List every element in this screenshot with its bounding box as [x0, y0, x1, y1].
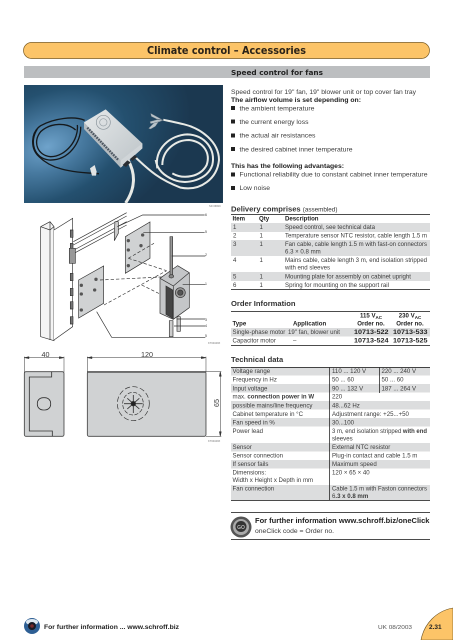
- table: technical data: 90 ... 132 V: [332, 386, 364, 392]
- icon: Schroff globe logo: [24, 618, 40, 634]
- intro text block: The airflow volume is set depending on:: [231, 97, 361, 104]
- table: technical data: max. connection power in W: [232, 394, 314, 400]
- table: delivery comprises: Spring for mounting on the support rail: [285, 282, 389, 289]
- dimension labels: 40: [42, 350, 50, 359]
- table: delivery comprises: 1: [260, 274, 264, 280]
- table: delivery comprises: Qty: [259, 216, 270, 222]
- table: delivery comprises: 4: [233, 257, 237, 264]
- dimension lines: [24, 357, 221, 436]
- callout numbers: 1: [205, 282, 207, 286]
- table: technical data: Cabinet temperature in °C: [232, 411, 304, 418]
- mounting plates: [79, 222, 150, 318]
- heading: technical data: Technical data: [231, 355, 284, 364]
- table: order information: 19" fan, blower unit: [288, 329, 340, 336]
- table: delivery comprises: Mains cable, cable length 3 m, end isolation stripped: [285, 257, 427, 264]
- table: delivery comprises: Fan cable, cable length 1.5 m with fast-on connectors: [285, 241, 427, 248]
- table: order information: 230 V: [399, 312, 415, 320]
- table: order information: [231, 312, 430, 346]
- table: technical data: 110 ... 120 V: [332, 368, 367, 375]
- table: delivery comprises: 1: [233, 224, 237, 231]
- table: order information: Order no.: [357, 320, 385, 328]
- heading: delivery comprises: Delivery comprises (assembled): [231, 204, 337, 214]
- callout numbers: 6: [205, 213, 207, 217]
- table: technical data: Voltage range: [232, 368, 271, 375]
- table: order information: Type: [232, 320, 247, 328]
- icon: oneClick disc: [230, 516, 252, 538]
- table: technical data: 48...62 Hz: [332, 402, 360, 410]
- dimension labels: [42, 350, 221, 407]
- cabinet upright: [41, 218, 73, 341]
- table: technical data: Power lead: [232, 428, 263, 435]
- table: technical data: If sensor fails: [232, 461, 268, 468]
- table: technical data: Input voltage: [232, 386, 268, 392]
- table: order information: 115 V: [360, 312, 376, 320]
- table: order information: 10713-524: [354, 338, 389, 344]
- image code label: SD 06829: [209, 204, 221, 208]
- bullet list: advantages: Functional reliability due to constant cabinet inner temperature: [240, 172, 428, 178]
- table: order information: 10713-533: [393, 329, 428, 336]
- table: delivery comprises: 1: [260, 282, 264, 289]
- table: delivery comprises: 6.3 × 0.8 mm: [285, 248, 321, 256]
- table: delivery comprises: with end sleeves: [284, 264, 330, 272]
- dimension drawing: side and front views: [24, 357, 221, 436]
- table: technical data: 220: [332, 394, 343, 400]
- table: order information: Capacitor motor: [232, 338, 276, 344]
- table: order information: AC: [376, 315, 383, 320]
- table: technical data: 50 ... 60: [332, 376, 355, 384]
- table: order information: 10713-522: [354, 329, 389, 336]
- table: delivery comprises: 1: [260, 224, 264, 231]
- bullet list: depending factors: the ambient temperature: [240, 106, 315, 112]
- table: delivery comprises: Mounting plate for assembly on cabinet upright: [285, 274, 411, 280]
- table: technical data: Cable 1.5 m with Faston connectors: [332, 486, 427, 492]
- table: technical data: sleeves: [332, 436, 353, 442]
- title banner: [24, 42, 430, 58]
- support rail and spring: [69, 213, 127, 263]
- bullet list: depending factors: the current energy loss: [240, 119, 308, 126]
- footer: logo and web address: For further information ... www.schroff.biz: [44, 624, 180, 631]
- section heading bar: Speed control for fans: [231, 68, 324, 77]
- callout numbers: [205, 213, 207, 338]
- table: technical data: Fan connection: [232, 486, 274, 492]
- table: technical data: Maximum speed: [332, 461, 377, 468]
- table: delivery comprises: Speed control, see technical data: [285, 224, 376, 231]
- table: technical data: Width x Height x Depth in mm: [232, 477, 313, 484]
- bullet list: advantages: Low noise: [240, 185, 271, 192]
- table: order information: Application: [293, 320, 326, 328]
- callout numbers: 4: [205, 324, 207, 328]
- page number tab: 2.31: [429, 624, 442, 631]
- callout numbers: 5: [205, 334, 207, 338]
- footer: edition: UK 08/2003: [378, 625, 412, 631]
- table: technical data: External NTC resistor: [332, 444, 390, 451]
- table: technical data: 120 × 65 × 40: [332, 470, 370, 476]
- table: technical data: 30...100: [332, 420, 355, 426]
- bullet list: depending factors: the desired cabinet inner temperature: [240, 146, 353, 153]
- exploded mounting drawing: [41, 213, 205, 341]
- table: technical data: 50 ... 60: [382, 376, 404, 384]
- callout numbers: 2: [205, 253, 207, 257]
- table: technical data: Plug-in contact and cable 1.5 m: [332, 452, 417, 460]
- intro text block: Speed control for 19" fan, 19" blower unit or top cover fan tray: [231, 89, 417, 96]
- callout numbers: 5: [205, 230, 207, 234]
- dimension labels: 65: [212, 399, 221, 407]
- callout leader lines: [97, 215, 205, 337]
- section heading bar: [24, 66, 430, 78]
- title banner: Climate control – Accessories: [147, 45, 306, 57]
- table: technical data: 220 ... 240 V: [382, 368, 417, 375]
- image code label: KT04049X: [208, 439, 221, 443]
- bullet list: depending factors: the actual air resistances: [240, 133, 316, 140]
- side view: [24, 372, 64, 436]
- table: technical data: [231, 367, 430, 500]
- table: technical data: 3 m, end isolation stripped with end: [332, 428, 427, 435]
- table: technical data: 187 ... 264 V: [382, 386, 417, 392]
- table: technical data: Fan speed in %: [232, 420, 275, 426]
- table: delivery comprises: 2: [233, 232, 237, 240]
- controller unit: [160, 237, 189, 337]
- icon: oneClick disc: GO: [237, 525, 245, 531]
- callout numbers: 3: [205, 318, 207, 322]
- bullet list: depending factors: [231, 106, 353, 153]
- oneClick callout: oneClick code = Order no.: [255, 528, 334, 535]
- image code label: KT04049X: [208, 341, 221, 345]
- table: delivery comprises: Item: [232, 216, 246, 222]
- table: delivery comprises: Description: [285, 216, 319, 222]
- footer: logo and web address: [24, 618, 180, 634]
- table: order information: 10713-525: [393, 338, 428, 344]
- table: delivery comprises: 1: [260, 257, 264, 264]
- oneClick callout: For further information www.schroff.biz/oneClick: [255, 516, 430, 525]
- table: technical data: Adjustment range: +25...+50: [332, 411, 410, 418]
- table: technical data: possible mains/line frequency: [232, 402, 313, 410]
- table: delivery comprises: 5: [233, 274, 237, 280]
- front view: [87, 372, 206, 436]
- intro text block: [231, 89, 428, 192]
- table: order information: Order no.: [396, 320, 424, 328]
- table: technical data: Frequency in Hz: [232, 376, 277, 384]
- oneClick callout: [230, 512, 430, 540]
- table: delivery comprises: 1: [260, 241, 264, 248]
- table: delivery comprises: Temperature sensor NTC resistor, cable length 1.5 m: [285, 232, 427, 240]
- dimension labels: 120: [141, 350, 153, 359]
- table: technical data: Sensor: [232, 444, 252, 451]
- table: technical data: 6.3 x 0.8 mm: [332, 493, 369, 500]
- table: delivery comprises: [231, 214, 430, 290]
- table: order information: Single-phase motor: [232, 329, 285, 336]
- intro text block: This has the following advantages:: [231, 163, 344, 170]
- table: technical data: Sensor connection: [232, 452, 283, 460]
- table: delivery comprises: 6: [233, 282, 237, 289]
- table: delivery comprises: 1: [260, 232, 264, 240]
- table: technical data: Dimensions:: [232, 470, 266, 476]
- bullet list: advantages: [231, 172, 428, 192]
- table: delivery comprises: 3: [233, 241, 237, 248]
- table: order information: –: [293, 338, 297, 344]
- table: order information: AC: [415, 315, 422, 320]
- product photo: speed control unit with cables: [24, 85, 223, 203]
- page number tab: [421, 608, 453, 640]
- heading: order information: Order Information: [231, 299, 296, 308]
